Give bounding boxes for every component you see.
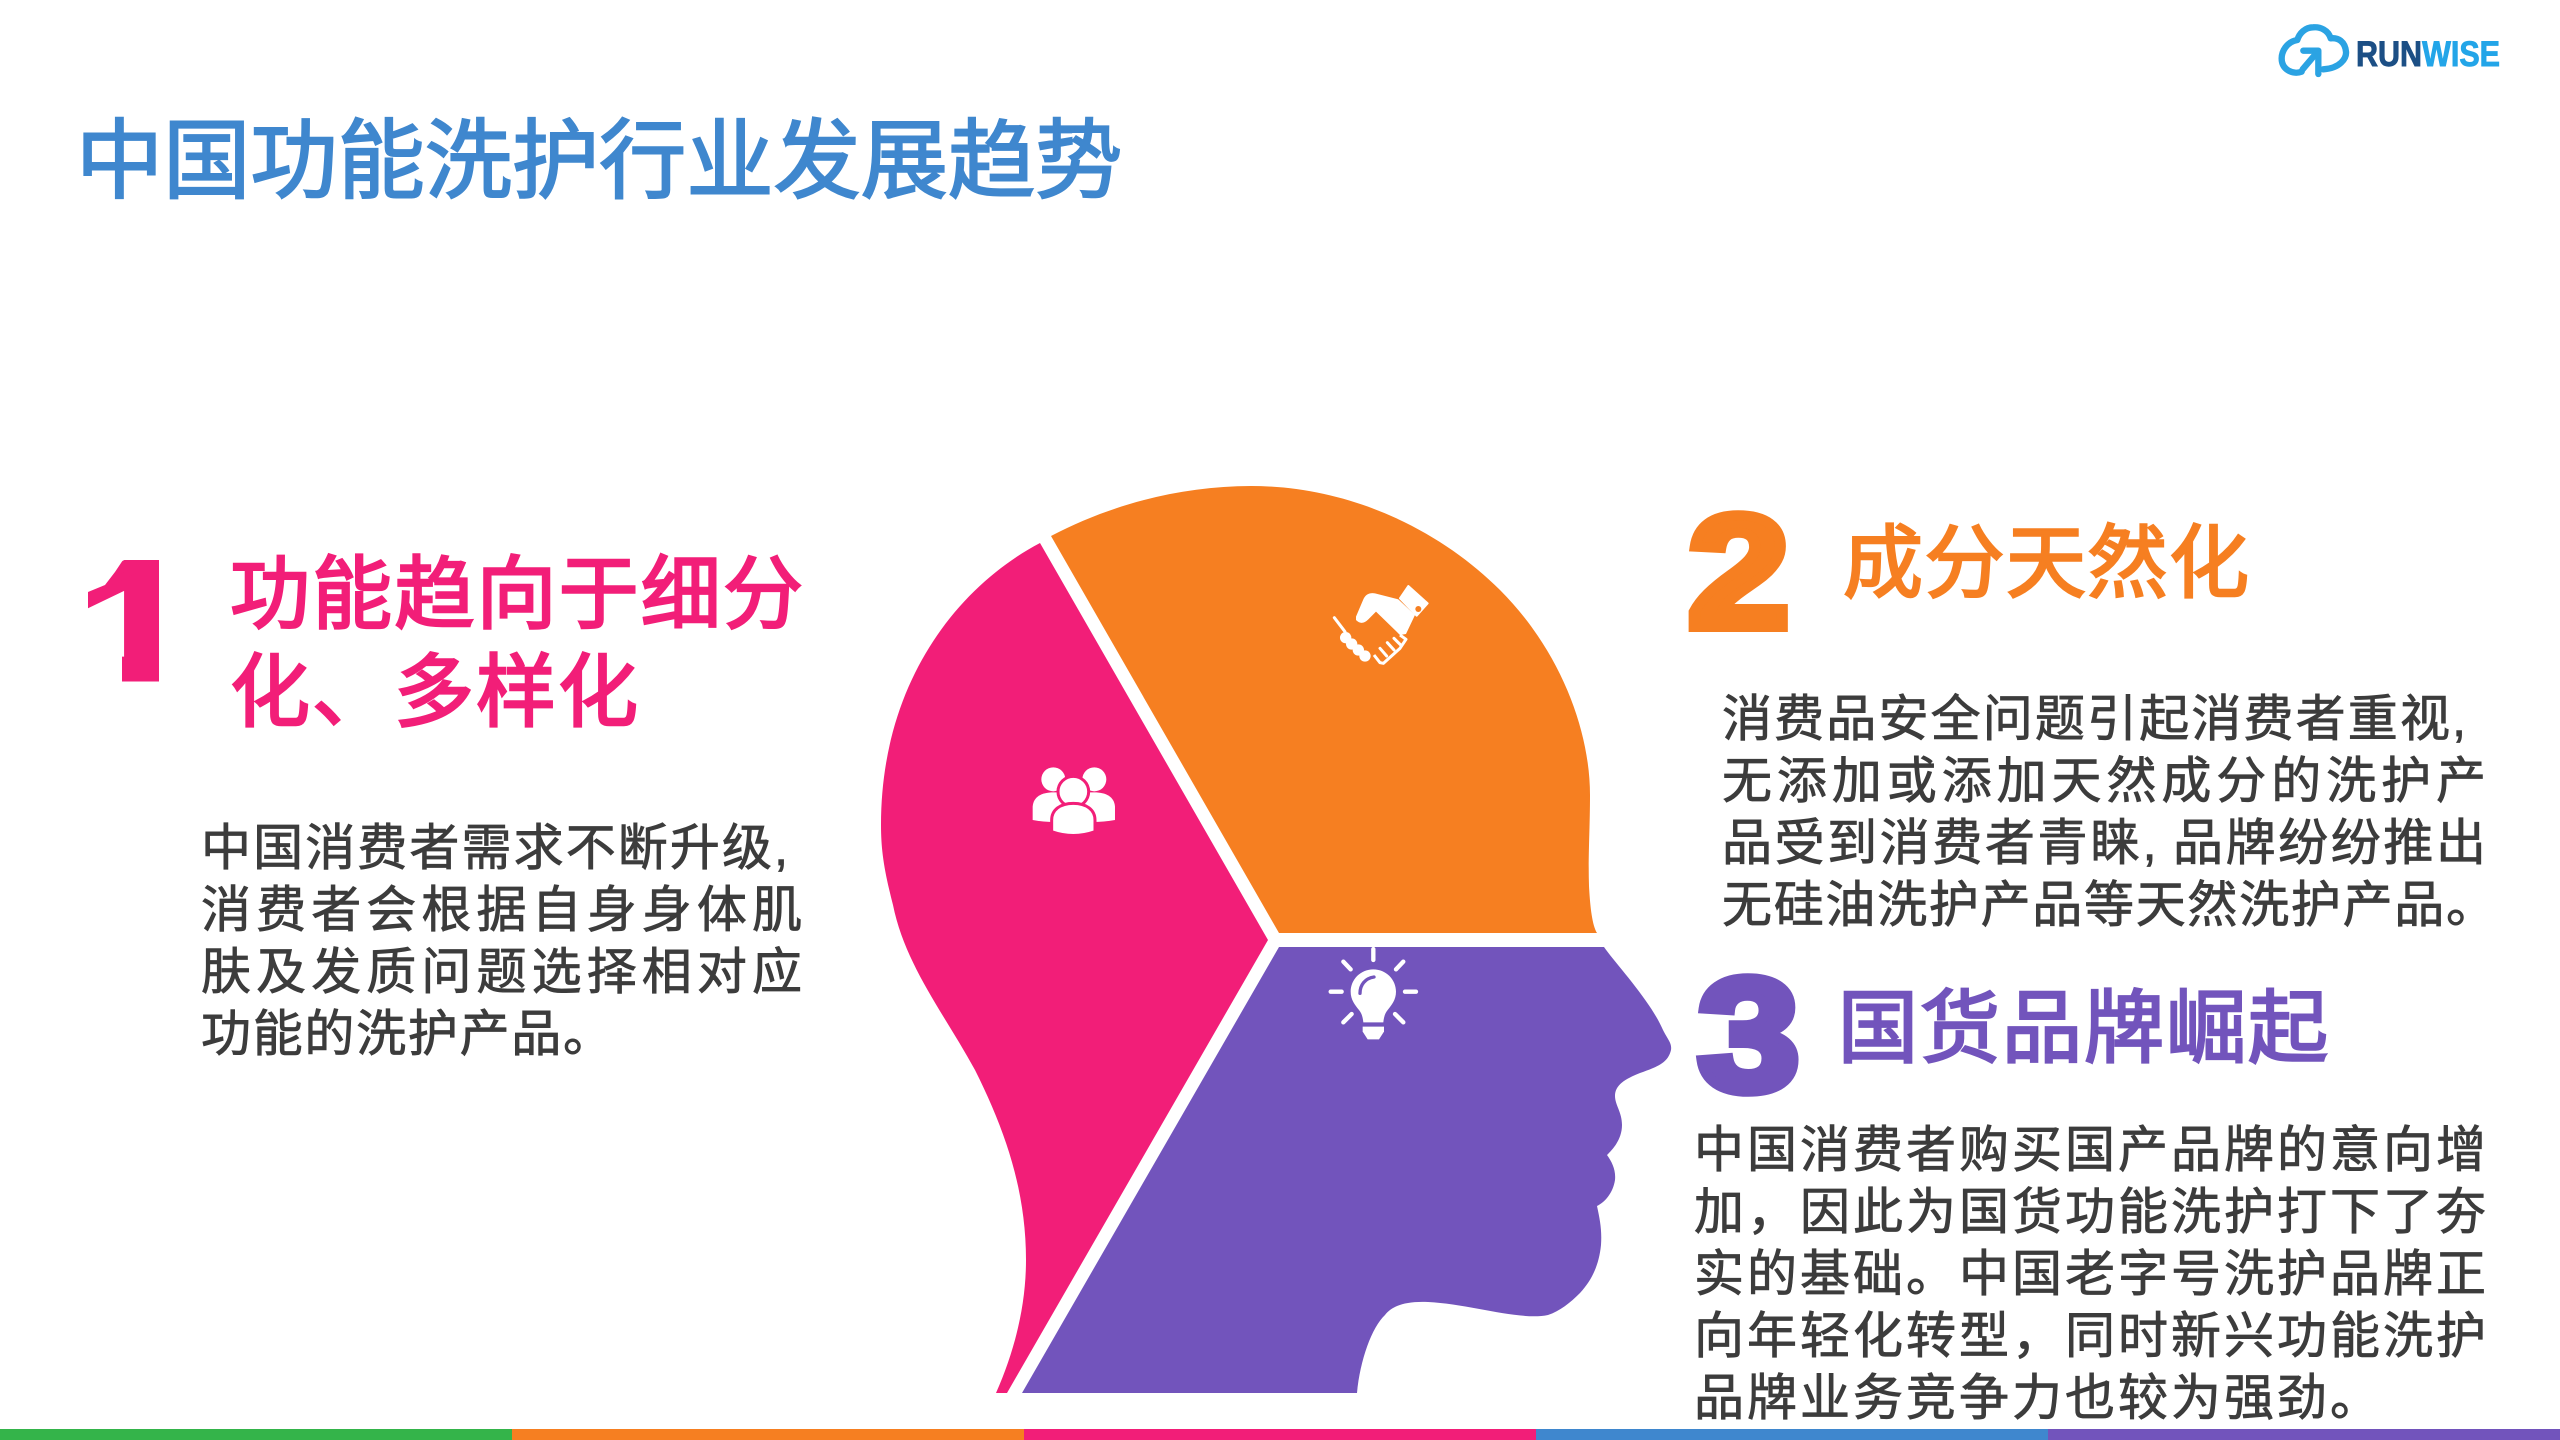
footer colour bar: [0, 1429, 2560, 1440]
heading 1: 功能趋向于细分: [230, 550, 803, 639]
heading 1: [230, 550, 803, 737]
head segment: pink: [881, 543, 1268, 1393]
body text 1: 中国消费者需求不断升级,: [201, 820, 788, 876]
body text 3: 实的基础。中国老字号洗护品牌正: [1694, 1246, 2486, 1302]
body text 3: 品牌业务竞争力也较为强劲。: [1694, 1370, 2380, 1426]
logo: Runwise: [2278, 24, 2500, 78]
body text 3: 加，因此为国货功能洗护打下了夯: [1694, 1184, 2486, 1240]
body text 1: 功能的洗护产品。: [201, 1006, 613, 1062]
body text 1: 肤及发质问题选择相对应: [201, 944, 802, 1000]
body text 1: 消费者会根据自身身体肌: [201, 882, 802, 938]
icon: people: [1033, 767, 1115, 835]
title: 中国功能洗护行业发展趋势: [76, 113, 1122, 210]
head segment: orange: [1051, 486, 1597, 933]
body text 1: [201, 820, 802, 1062]
logo: Runwise: RUNWISE: [2356, 35, 2500, 74]
heading 2: 成分天然化: [1843, 519, 2249, 608]
body text 2: 无添加或添加天然成分的洗护产: [1722, 753, 2486, 809]
heading 3: 国货品牌崛起: [1838, 984, 2328, 1073]
body text 2: [1722, 691, 2496, 933]
heading 1: 化、多样化: [230, 648, 638, 737]
body text 2: 品受到消费者青睐, 品牌纷纷推出: [1722, 815, 2486, 871]
number 3: 3: [1698, 945, 1799, 1124]
icon: handshake: [1334, 586, 1428, 663]
icon: light bulb: [1331, 949, 1416, 1039]
body text 3: 中国消费者购买国产品牌的意向增: [1694, 1122, 2486, 1178]
body text 2: 消费品安全问题引起消费者重视,: [1722, 691, 2466, 747]
body text 3: [1694, 1122, 2486, 1426]
number 2: 2: [1688, 482, 1789, 661]
body text 3: 向年轻化转型，同时新兴功能洗护: [1694, 1308, 2486, 1364]
body text 2: 无硅油洗护产品等天然洗护产品。: [1722, 877, 2496, 933]
head segment: purple: [1022, 947, 1671, 1393]
